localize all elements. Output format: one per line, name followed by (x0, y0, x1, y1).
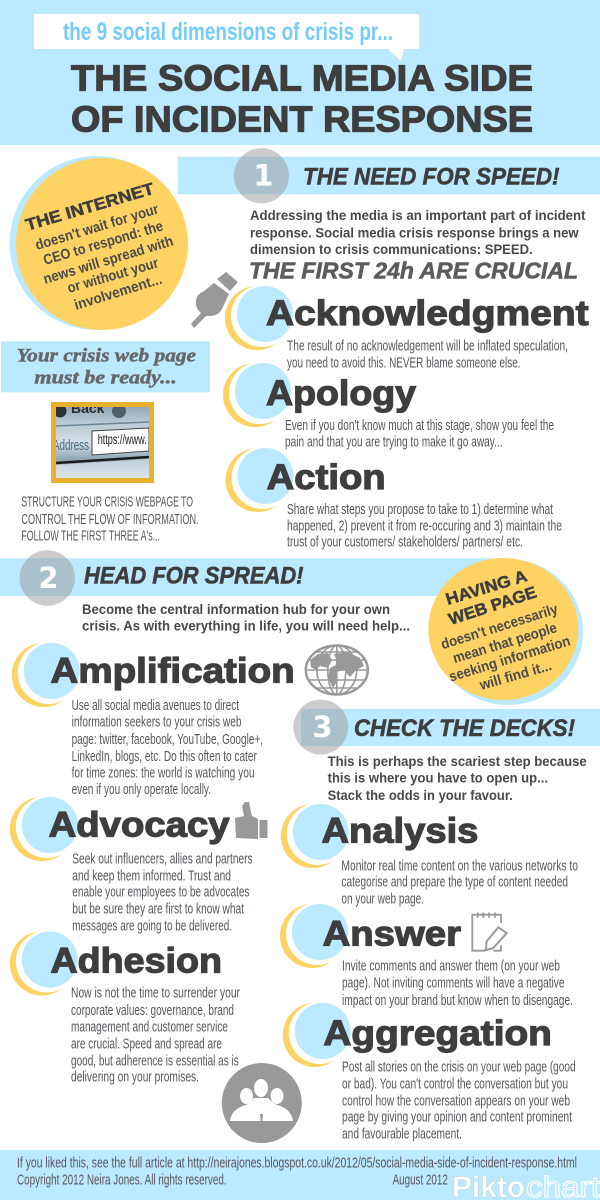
section 1 heading bar: 1 (253, 158, 274, 192)
image: browser address bar: Back (71, 400, 105, 416)
item: adhesion: Adhesion (50, 942, 222, 981)
item: action (226, 447, 562, 551)
item: adhesion: are crucial. Speed and spread are (71, 1036, 222, 1053)
section 2 intro text: crisis. As with everything in life, you will need help... (82, 618, 410, 634)
item: analysis (281, 803, 578, 907)
section 1 intro text: response. Social media crisis response brings a new (250, 224, 579, 240)
section 1 intro text: dimension to crisis communications: SPEED. (250, 241, 533, 257)
section 3 intro text: Stack the odds in your favour. (328, 787, 513, 803)
section 3 intro text: this is where you have to open up... (328, 770, 548, 786)
callout: having a web page: seeking information (447, 633, 572, 686)
footer: August 2012 (393, 1172, 448, 1189)
section 2 heading bar: HEAD FOR SPREAD! (84, 562, 304, 589)
item: advocacy: Advocacy (49, 806, 230, 845)
section 2 intro text: Become the central information hub for your own (82, 601, 390, 617)
item: aggregation: and favourable placement. (342, 1126, 462, 1143)
watermark: Piktochart (452, 1171, 600, 1200)
icon: globe (306, 646, 368, 694)
section 1 intro text: Addressing the media is an important part of incident (250, 207, 586, 223)
callout: the internet: or without your (66, 255, 161, 297)
callout: the internet: doesn't wait for your (34, 201, 161, 254)
item: apology (223, 362, 554, 451)
item: advocacy: enable your employees to be advocates (72, 884, 250, 901)
item: amplification: Amplification (50, 652, 295, 691)
callout: the internet (10, 156, 188, 330)
panel: crisis web page ready: must be ready... (34, 367, 177, 388)
item: apology: Apology (266, 374, 417, 413)
callout: the internet: news will spread with (42, 233, 175, 288)
icon: thumbs up (235, 802, 268, 839)
section 3 heading bar: 3 (312, 710, 333, 744)
item: amplification: LinkedIn, blogs, etc. Do this often to cater (72, 748, 257, 765)
text: structure your crisis webpage: FOLLOW THE FIRST THREE A's... (21, 528, 160, 545)
callout: having a web page: doesn't necessarily (439, 602, 560, 653)
callout: having a web page (428, 558, 583, 705)
icon: pointing hand (191, 272, 238, 328)
callout: having a web page: mean that people (451, 620, 559, 667)
item: advocacy: but be sure they are first to know what (72, 900, 245, 917)
callout: the internet: THE INTERNET (24, 180, 156, 235)
item: aggregation (283, 1002, 576, 1143)
item: adhesion: delivering on your promises. (71, 1069, 199, 1086)
item: adhesion: good, but adherence is essential as is (71, 1053, 239, 1070)
item: advocacy: and keep them informed. Trust and (72, 868, 231, 885)
image: browser address bar (51, 400, 154, 483)
item: adhesion: management and customer service (71, 1019, 228, 1036)
item: acknowledgment: Acknowledgment (266, 294, 589, 333)
callout: the internet: CEO to respond: the (42, 218, 165, 269)
title (71, 58, 533, 140)
title: THE SOCIAL MEDIA SIDE (71, 58, 533, 99)
item: acknowledgment (225, 285, 589, 372)
speech bubble subtitle (34, 14, 419, 61)
speech bubble subtitle: the 9 social dimensions of crisis pr... (63, 18, 393, 46)
image: browser address bar: Address (53, 437, 89, 454)
callout: the internet: involvement... (72, 272, 164, 314)
text: structure your crisis webpage: CONTROL THE FLOW OF INFORMATION. (21, 511, 199, 528)
section 1 intro text (250, 207, 586, 257)
callout: having a web page: will find it... (477, 658, 554, 694)
footer (0, 1150, 600, 1200)
section 2 heading bar: 2 (38, 561, 59, 595)
section 1 heading bar (178, 148, 600, 203)
section 2 heading bar (0, 550, 500, 606)
title: OF INCIDENT RESPONSE (71, 99, 533, 140)
item: advocacy: messages are going to be delivered. (72, 918, 232, 935)
text: structure your crisis webpage (21, 494, 199, 545)
panel: crisis web page ready: Your crisis web page (16, 346, 197, 367)
item: amplification: information seekers to your crisis web (72, 714, 241, 731)
item: aggregation: Aggregation (323, 1014, 552, 1053)
item: amplification: even if you only operate locally. (72, 781, 211, 798)
item: advocacy: Seek out influencers, allies and partners (72, 850, 253, 867)
item: amplification: Use all social media avenues to direct (72, 697, 240, 714)
item: advocacy (10, 796, 253, 935)
item: amplification: for time zones: the world is watching you (72, 765, 254, 782)
item: analysis: Analysis (322, 812, 478, 851)
section 3 intro text (328, 753, 587, 803)
item: adhesion: Now is not the time to surrender your (71, 985, 240, 1002)
subheading: first 24h: THE FIRST 24h ARE CRUCIAL (249, 257, 578, 283)
callout: having a web page: HAVING A (444, 567, 529, 609)
section 3 intro text: This is perhaps the scariest step because (328, 753, 587, 769)
item: analysis: on your web page. (341, 890, 424, 907)
section 2 intro text (82, 601, 410, 634)
section 3 heading bar: CHECK THE DECKS! (354, 715, 575, 742)
callout: having a web page: WEB PAGE (446, 583, 539, 629)
section 3 heading bar (293, 700, 600, 754)
icon: people (222, 1063, 302, 1143)
section 1 heading bar: THE NEED FOR SPEED! (303, 163, 560, 190)
item: adhesion: corporate values: governance, brand (71, 1002, 234, 1019)
item: action: Action (267, 458, 386, 497)
item: answer (280, 903, 573, 1009)
item: adhesion (10, 930, 240, 1086)
item: amplification (12, 642, 295, 798)
panel: crisis web page ready (1, 341, 210, 392)
item: amplification: page: twitter, facebook, YouTube, Google+, (72, 731, 263, 748)
item: apology: pain and that you are trying to make it go away... (285, 434, 502, 451)
image: browser address bar: https://www. (98, 431, 147, 447)
icon: notepad and pencil (472, 912, 507, 951)
header band (0, 0, 600, 145)
item: answer: Answer (323, 915, 461, 954)
text: structure your crisis webpage: STRUCTURE YOUR CRISIS WEBPAGE TO (21, 494, 193, 511)
footer: Copyright 2012 Neira Jones. All rights reserved. (17, 1172, 227, 1189)
